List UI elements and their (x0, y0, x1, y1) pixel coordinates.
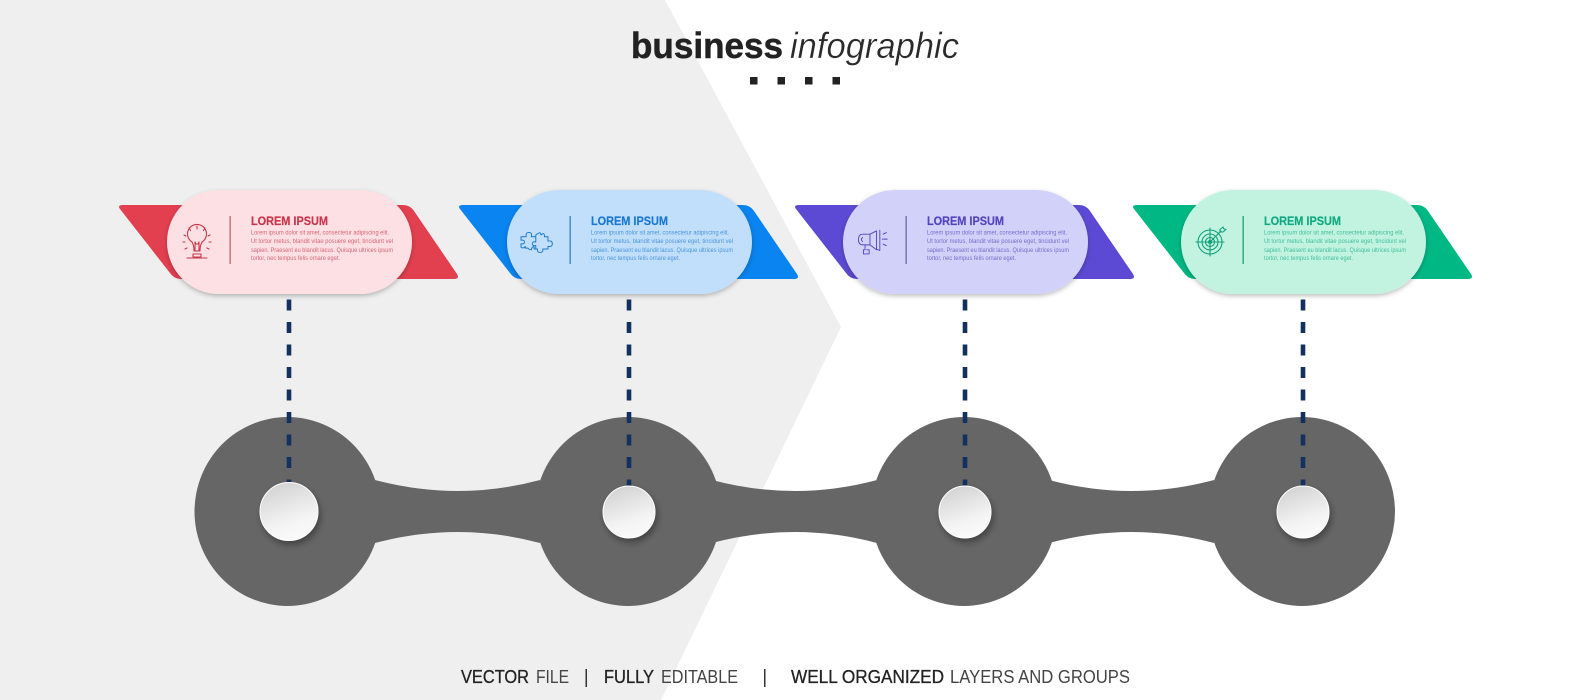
footer text: VECTOR (461, 667, 529, 687)
background arrow (0, 0, 841, 700)
text block: tortor, nec tempus felis ornare eget. (251, 255, 340, 262)
text block: Ut tortor metus, blandit vitae posuere eget, tincidunt vel (591, 238, 733, 245)
icon: light bulb (183, 224, 211, 258)
timeline node 4 (1277, 486, 1329, 538)
text block: Lorem ipsum dolor sit amet, consectetur adipiscing elit. (927, 230, 1067, 236)
timeline node 2 (603, 486, 655, 538)
text block: tortor, nec tempus felis ornare eget. (927, 255, 1016, 262)
heading: LOREM IPSUM (1264, 214, 1341, 228)
panel: step 4 green (1133, 190, 1472, 294)
panel: step 2 blue (459, 190, 798, 294)
footer text: LAYERS AND GROUPS (950, 667, 1130, 687)
title dots (750, 77, 840, 84)
text block: Ut tortor metus, blandit vitae posuere eget, tincidunt vel (251, 238, 393, 245)
panel: step 3 purple (795, 190, 1134, 294)
heading: LOREM IPSUM (591, 214, 668, 228)
footer text: EDITABLE (661, 667, 738, 687)
text block: tortor, nec tempus felis ornare eget. (1264, 255, 1353, 262)
footer text: FILE (536, 667, 569, 687)
timeline node 1 (260, 482, 318, 540)
text block (927, 230, 1069, 262)
panel: step 1 red (119, 190, 458, 294)
text block: sapien. Praesent eu blandit lacus. Quisque ultrices ipsum (251, 247, 393, 254)
text block: Ut tortor metus, blandit vitae posuere eget, tincidunt vel (927, 238, 1069, 245)
icon: megaphone (858, 230, 887, 254)
text block: sapien. Praesent eu blandit lacus. Quisque ultrices ipsum (1264, 247, 1406, 254)
title: business (631, 25, 783, 66)
timeline node 3 (939, 486, 991, 538)
text block (1264, 230, 1406, 262)
text block (591, 230, 733, 262)
title: infographic (790, 25, 959, 66)
text block: Ut tortor metus, blandit vitae posuere eget, tincidunt vel (1264, 238, 1406, 245)
text block: Lorem ipsum dolor sit amet, consectetur adipiscing elit. (1264, 230, 1404, 236)
footer text: WELL ORGANIZED (791, 667, 944, 687)
text block: sapien. Praesent eu blandit lacus. Quisque ultrices ipsum (591, 247, 733, 254)
title (631, 25, 959, 66)
footer text (461, 667, 1130, 687)
text block (251, 230, 393, 262)
footer text: FULLY (604, 667, 654, 687)
text block: tortor, nec tempus felis ornare eget. (591, 255, 680, 262)
text block: Lorem ipsum dolor sit amet, consectetur adipiscing elit. (251, 230, 389, 236)
dashed connectors (289, 300, 1303, 488)
timeline track (194, 417, 1395, 606)
heading: LOREM IPSUM (927, 214, 1004, 228)
text block: sapien. Praesent eu blandit lacus. Quisque ultrices ipsum (927, 247, 1069, 254)
icon: puzzle (521, 232, 552, 252)
icon: target (1196, 227, 1226, 256)
heading: LOREM IPSUM (251, 214, 328, 228)
text block: Lorem ipsum dolor sit amet, consectetur adipiscing elit. (591, 230, 729, 236)
